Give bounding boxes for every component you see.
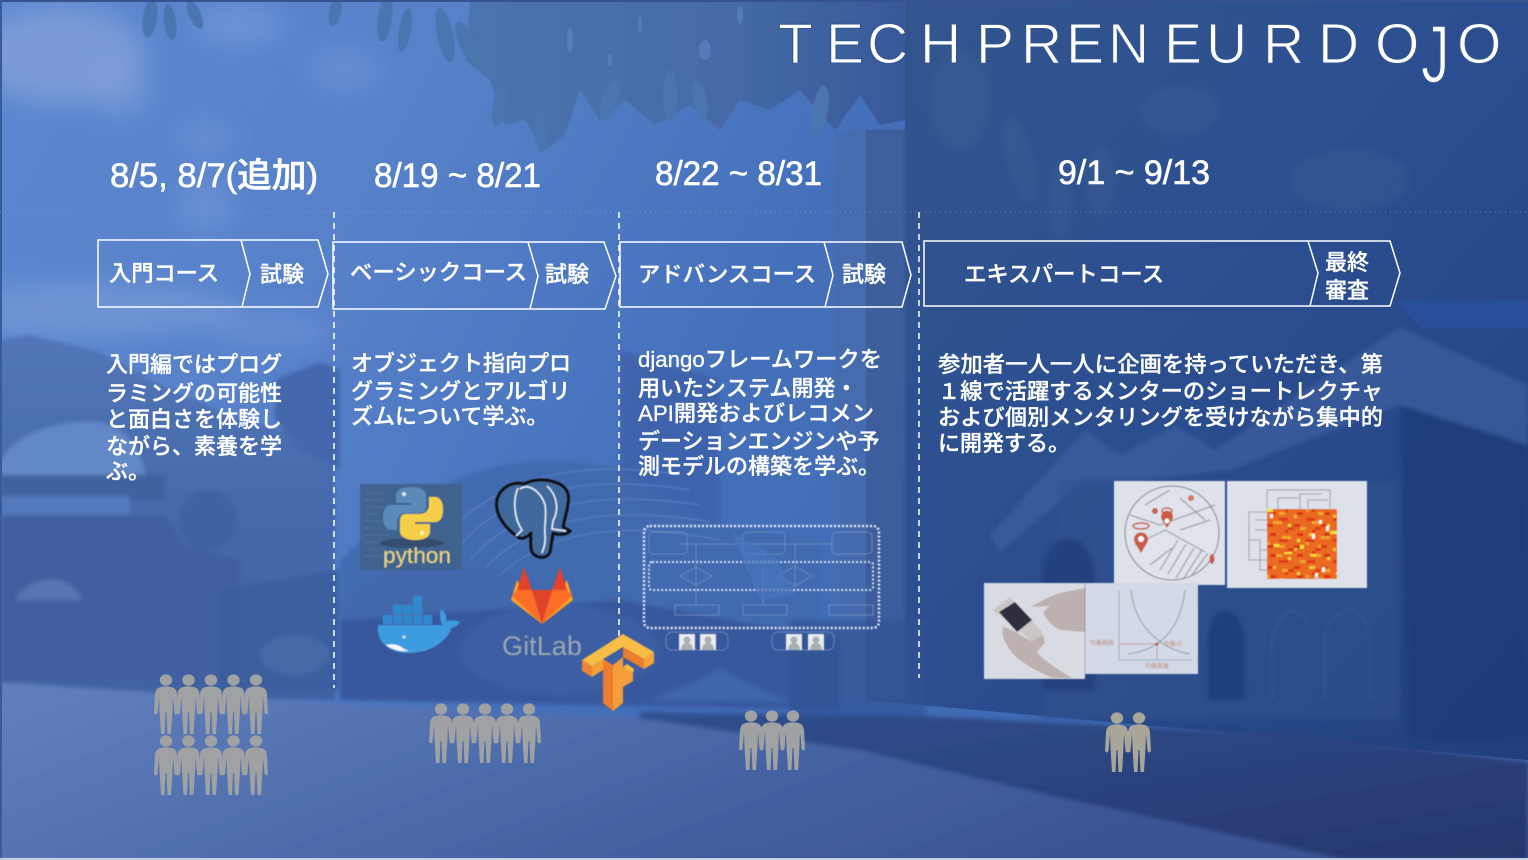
- image: supply and demand chart: 均衡点: [1164, 640, 1182, 648]
- image: supply and demand chart: [1085, 583, 1198, 674]
- dashed column dividers: [0, 212, 1528, 688]
- image: hands using smartphone: [984, 583, 1085, 679]
- title: TECHPRENEUR DOJO: [778, 8, 1501, 99]
- people: advanced course participants (3): [739, 710, 805, 770]
- chevron: basic course and test: 試験: [545, 262, 589, 287]
- description: expert course: １線で活躍するメンターのショートレクチャ: [938, 379, 1383, 404]
- description: intro course: [106, 352, 282, 484]
- icon: tensorflow logo: [582, 634, 654, 711]
- date headers: [110, 154, 1210, 195]
- description: intro course: と面白さを体験し: [106, 407, 282, 432]
- chevron: advanced course and test: アドバンスコース: [638, 262, 816, 287]
- title: TECHPRENEUR DOJO: DO: [1318, 12, 1419, 76]
- diagram: system architecture: [644, 526, 879, 650]
- people: basic course participants (5): [429, 703, 541, 763]
- description: basic course: [351, 351, 571, 429]
- date: expert course: 9/1 ~ 9/13: [1058, 154, 1210, 192]
- description: basic course: グラミングとアルゴリ: [351, 379, 570, 404]
- description: advanced course: 測モデルの構築を学ぶ。: [638, 454, 880, 479]
- description: basic course: ズムについて学ぶ。: [351, 404, 548, 429]
- icon: postgresql elephant: [497, 480, 570, 557]
- description: expert course: 参加者一人一人に企画を持っていただき、第: [938, 352, 1383, 377]
- description: intro course: 入門編ではプログ: [106, 352, 282, 377]
- right building: [866, 0, 1528, 760]
- date: intro course: 8/5, 8/7(追加): [110, 157, 318, 195]
- chevron: basic course and test: ベーシックコース: [350, 260, 527, 285]
- chevron: advanced course and test: [620, 242, 911, 307]
- icon: python logo: [360, 484, 462, 570]
- description: intro course: ながら、素養を学: [106, 434, 282, 459]
- icon: docker whale: [378, 596, 460, 653]
- tree canopy: [465, 0, 905, 150]
- chevron: basic course and test: [333, 242, 616, 309]
- description: expert course: に開発する。: [938, 431, 1070, 456]
- date: basic course: 8/19 ~ 8/21: [374, 157, 541, 195]
- title: TECHPRENEUR DOJO: TECHPRENEUR: [778, 12, 1304, 76]
- description: advanced course: API開発およびレコメン: [638, 401, 874, 426]
- gabled roofs: [990, 327, 1528, 740]
- gitlab wordmark: GitLab: [502, 631, 582, 661]
- people: expert course participants (2): [1105, 712, 1151, 772]
- icon: python logo: python: [383, 543, 451, 568]
- image: clustered heatmap: [1227, 481, 1367, 588]
- description: intro course: ぶ。: [106, 459, 150, 484]
- description: advanced course: [638, 347, 882, 479]
- chevron: intro course and test: [98, 240, 328, 307]
- description: advanced course: デーションエンジンや予: [638, 429, 880, 454]
- chevron: expert course and final review: エキスパートコース: [964, 262, 1164, 287]
- description: advanced course: 用いたシステム開発・: [638, 376, 857, 401]
- description: basic course: オブジェクト指向プロ: [351, 351, 571, 376]
- description: expert course: および個別メンタリングを受けながら集中的: [938, 405, 1383, 430]
- icon: gitlab logo: [502, 567, 582, 661]
- left building: [0, 335, 340, 700]
- date: advanced course: 8/22 ~ 8/31: [655, 155, 822, 193]
- title: TECHPRENEUR DOJO: J: [1421, 8, 1449, 99]
- description: advanced course: djangoフレームワークを: [638, 347, 882, 372]
- chevron: intro course and test: 試験: [260, 262, 304, 287]
- chevron: intro course and test: 入門コース: [109, 261, 219, 286]
- image: supply and demand chart: 均衡数量: [1145, 662, 1169, 670]
- chevron: expert course and final review: 審査: [1325, 278, 1369, 303]
- title: TECHPRENEUR DOJO: O: [1457, 12, 1501, 76]
- centre trees and arch: [340, 350, 925, 720]
- chevron: expert course and final review: [924, 241, 1400, 306]
- ground: [640, 712, 1528, 860]
- people: intro course participants (10): [154, 674, 268, 795]
- description: expert course: [938, 352, 1383, 456]
- chevron: advanced course and test: 試験: [842, 262, 886, 287]
- image: supply and demand chart: 均衡価格: [1090, 639, 1114, 647]
- chevron: expert course and final review: 最終: [1325, 250, 1369, 275]
- image: map with location pins: [1114, 481, 1225, 585]
- description: intro course: ラミングの可能性: [106, 381, 282, 406]
- user icons: [679, 634, 824, 650]
